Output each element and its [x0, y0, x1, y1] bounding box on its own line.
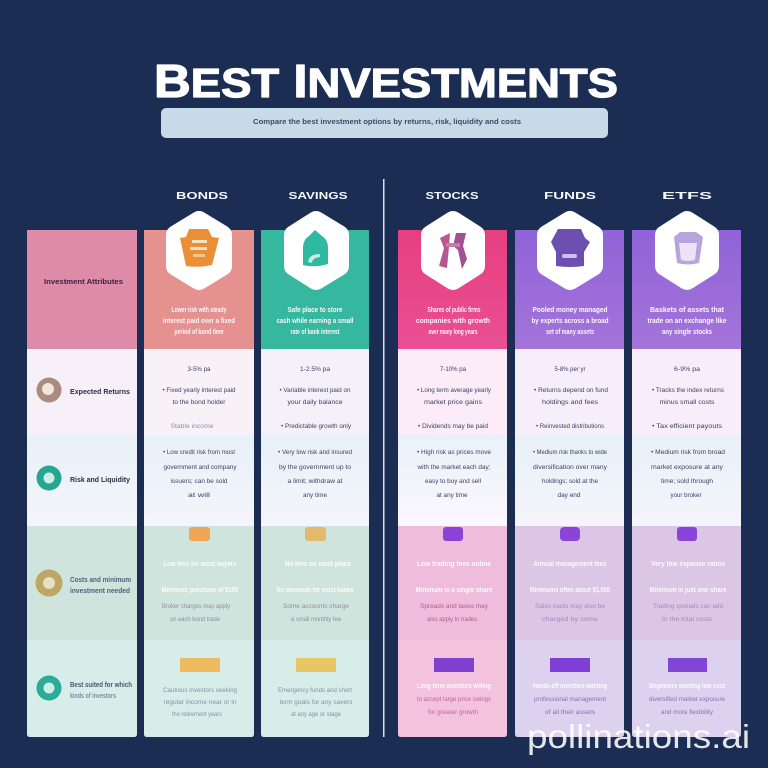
icon: purple bag: [547, 221, 593, 280]
subtitle banner: Compare the best investment options by returns, risk, liquidity and costs: [253, 119, 521, 126]
best-for text: [278, 687, 353, 718]
header description: trade on an exchange like: [648, 318, 727, 325]
best-for text: regular income near or in: [164, 699, 237, 706]
best-for text: term goals for any savers: [280, 699, 353, 706]
cost text: Low fees for most buyers: [164, 561, 237, 568]
best-for text: Hands-off investors wanting: [533, 683, 607, 690]
best-for text: at any age or stage: [291, 711, 341, 718]
risk text: day end: [558, 492, 581, 499]
risk text: a limit; withdraw at: [288, 478, 343, 485]
returns text: • Dividends may be paid: [418, 423, 488, 430]
cost text: Minimum purchase of $100: [162, 587, 239, 594]
attribute header: [27, 230, 137, 349]
returns text: 6-9% pa: [674, 366, 700, 373]
cost text: Broker charges may apply: [162, 603, 231, 610]
column headings: [176, 190, 712, 202]
label: costs: [70, 577, 131, 595]
best-for text: [649, 683, 726, 716]
cost text: Minimum is just one share: [650, 587, 727, 594]
risk text: government and company: [164, 464, 237, 471]
panel: savings: [261, 221, 369, 737]
column headings: STOCKS: [426, 190, 478, 202]
best-for text: diversified market exposure: [649, 696, 725, 703]
header description: [416, 307, 490, 336]
risk text: any time: [303, 492, 327, 499]
cost text: [162, 561, 239, 623]
icon: best for: [36, 676, 62, 700]
label: returns: Expected Returns: [70, 389, 130, 396]
risk text: at will: [188, 492, 211, 499]
label: costs: Costs and minimum: [70, 577, 131, 584]
returns text: • Predictable growth only: [281, 423, 352, 430]
risk text: time; sold through: [661, 478, 713, 485]
cost text: a small monthly fee: [291, 616, 341, 623]
cost text: Spreads and taxes may: [420, 603, 489, 610]
returns text: • Tracks the index returns: [652, 387, 725, 394]
cost text: Annual management fees: [534, 561, 607, 568]
returns text: 3-5% pa: [188, 366, 211, 373]
header description: [276, 307, 354, 336]
cost text: charged by some: [542, 616, 598, 623]
risk text: holdings; sold at the: [542, 478, 598, 485]
risk text: by the government up to: [279, 464, 351, 471]
best-for text: to accept large price swings: [417, 696, 492, 703]
cost pill: [305, 527, 326, 541]
cost text: Sales loads may also be: [535, 603, 605, 610]
best-for text: and more flexibility: [661, 709, 714, 716]
cost text: [276, 561, 354, 623]
header description: over many long years: [428, 329, 478, 336]
best-for bar: [434, 658, 474, 672]
title: BEST INVESTMENTS: [154, 55, 618, 107]
panel: bonds: [144, 221, 254, 737]
best-for bar: [296, 658, 336, 672]
risk text: • Very low risk and insured: [278, 449, 352, 456]
cost pill: [677, 527, 697, 541]
risk text: [533, 449, 608, 499]
watermark: pollinations.ai: [527, 718, 750, 755]
header description: Pooled money managed: [532, 307, 608, 314]
header description: companies with growth: [416, 318, 490, 325]
risk text: • High risk as prices move: [417, 449, 491, 456]
header description: interest paid over a fixed: [163, 318, 235, 325]
cost text: No fees on most plans: [285, 561, 351, 568]
returns text: • Tax efficient payouts: [652, 423, 723, 430]
cost text: [416, 561, 493, 623]
returns text: • Fixed yearly interest paid: [162, 387, 236, 394]
returns text: • Long term average yearly: [417, 387, 492, 394]
risk text: with the market each day;: [417, 464, 491, 471]
returns text: • Variable interest paid on: [280, 387, 351, 394]
header description: period of bond time: [174, 329, 224, 336]
returns text: [162, 366, 236, 430]
risk text: [651, 449, 725, 499]
header description: rate of bank interest: [290, 329, 340, 336]
label: best for: [70, 682, 132, 700]
icon: bucket: [665, 221, 709, 280]
cost text: Minimum is a single share: [416, 587, 493, 594]
cost text: Very low expense ratios: [651, 561, 725, 568]
header description: cash while earning a small: [276, 318, 354, 325]
cost text: on each bond trade: [170, 616, 220, 623]
risk text: • Medium risk thanks to wide: [533, 449, 607, 456]
risk text: [417, 449, 491, 499]
icon: risk: [36, 466, 62, 490]
best-for text: of all their assets: [545, 709, 596, 716]
risk text: easy to buy and sell: [425, 478, 482, 485]
risk text: diversification over many: [533, 464, 608, 471]
best-for text: for greater growth: [428, 709, 478, 716]
best-for bar: [550, 658, 590, 672]
label: best for: Best suited for which: [70, 682, 132, 689]
panel: funds: [515, 221, 624, 737]
icon: stocks figure: [431, 221, 475, 280]
header description: Baskets of assets that: [650, 307, 725, 314]
icon: teal backpack: [294, 221, 339, 280]
risk text: • Medium risk from broad: [651, 449, 725, 456]
best-for text: Beginners wanting low cost: [649, 683, 726, 690]
header description: [532, 307, 608, 336]
risk text: at any time: [436, 492, 468, 499]
best-for text: [533, 683, 607, 716]
panel: attribute labels: [27, 230, 137, 737]
panel: ETFs: [632, 221, 741, 737]
cost pill: [189, 527, 210, 541]
column headings: ETFS: [662, 190, 712, 202]
column headings: FUNDS: [544, 190, 596, 202]
header description: set of many assets: [546, 329, 594, 336]
returns text: market price gains: [424, 399, 483, 406]
column headings: BONDS: [176, 190, 228, 202]
returns text: [534, 366, 608, 430]
best-for text: the retirement years: [172, 711, 223, 718]
label: risk: Risk and Liquidity: [70, 477, 130, 484]
best-for text: [417, 683, 492, 716]
header description: Lower risk with steady: [172, 307, 227, 314]
returns text: [417, 366, 492, 430]
panel: stocks: [398, 221, 507, 737]
header description: [163, 307, 235, 336]
returns text: minus small costs: [660, 399, 715, 406]
best-for text: professional management: [534, 696, 606, 703]
risk text: [278, 449, 352, 499]
best-for bar: [668, 658, 707, 672]
label: best for: kinds of investors: [70, 693, 116, 700]
cost text: [650, 561, 727, 623]
risk text: • Low credit risk from most: [163, 449, 235, 456]
best-for bar: [180, 658, 220, 672]
returns text: to the bond holder: [172, 399, 226, 406]
icon: returns: [36, 378, 62, 402]
header description: Safe place to store: [288, 307, 343, 314]
returns text: • Returns depend on fund: [534, 387, 608, 394]
best-for text: Cautious investors seeking: [163, 687, 237, 694]
risk text: market exposure at any: [651, 464, 724, 471]
header description: [648, 307, 727, 336]
returns text: [652, 366, 725, 430]
returns text: 7-10% pa: [440, 366, 466, 373]
cost text: also apply to trades: [427, 616, 478, 623]
cost text: Some accounts charge: [283, 603, 349, 610]
cost text: Trading spreads can add: [653, 603, 723, 610]
header description: any single stocks: [662, 329, 712, 336]
cost text: [530, 561, 610, 623]
returns text: Stable income: [170, 423, 214, 430]
cost pill: [560, 527, 580, 541]
risk text: your broker: [670, 492, 702, 499]
attribute header: Investment Attributes: [44, 277, 123, 286]
cost text: Low trading fees online: [417, 561, 491, 568]
returns text: holdings and fees: [542, 399, 599, 406]
best-for text: [163, 687, 237, 718]
best-for text: Emergency funds and short: [278, 687, 352, 694]
header description: by experts across a broad: [532, 318, 608, 325]
subtitle banner: [161, 108, 608, 138]
cost text: No minimum for most banks: [276, 587, 354, 594]
returns text: • Reinvested distributions: [536, 423, 605, 430]
column headings: SAVINGS: [288, 190, 348, 202]
returns text: 5-8% per yr: [554, 366, 586, 373]
header description: Shares of public firms: [428, 307, 481, 314]
returns text: your daily balance: [288, 399, 343, 406]
divider: [383, 179, 384, 737]
risk text: [163, 449, 237, 499]
label: costs: investment needed: [70, 588, 130, 595]
best-for text: Long term investors willing: [417, 683, 491, 690]
cost pill: [443, 527, 463, 541]
returns text: 1-2.5% pa: [300, 366, 330, 373]
icon: orange bag: [176, 221, 222, 280]
risk text: issuers; can be sold: [170, 478, 228, 485]
returns text: [280, 366, 352, 430]
cost text: Minimums often about $1,000: [530, 587, 610, 594]
icon: costs: [36, 570, 62, 596]
cost text: to the total costs: [662, 616, 713, 623]
